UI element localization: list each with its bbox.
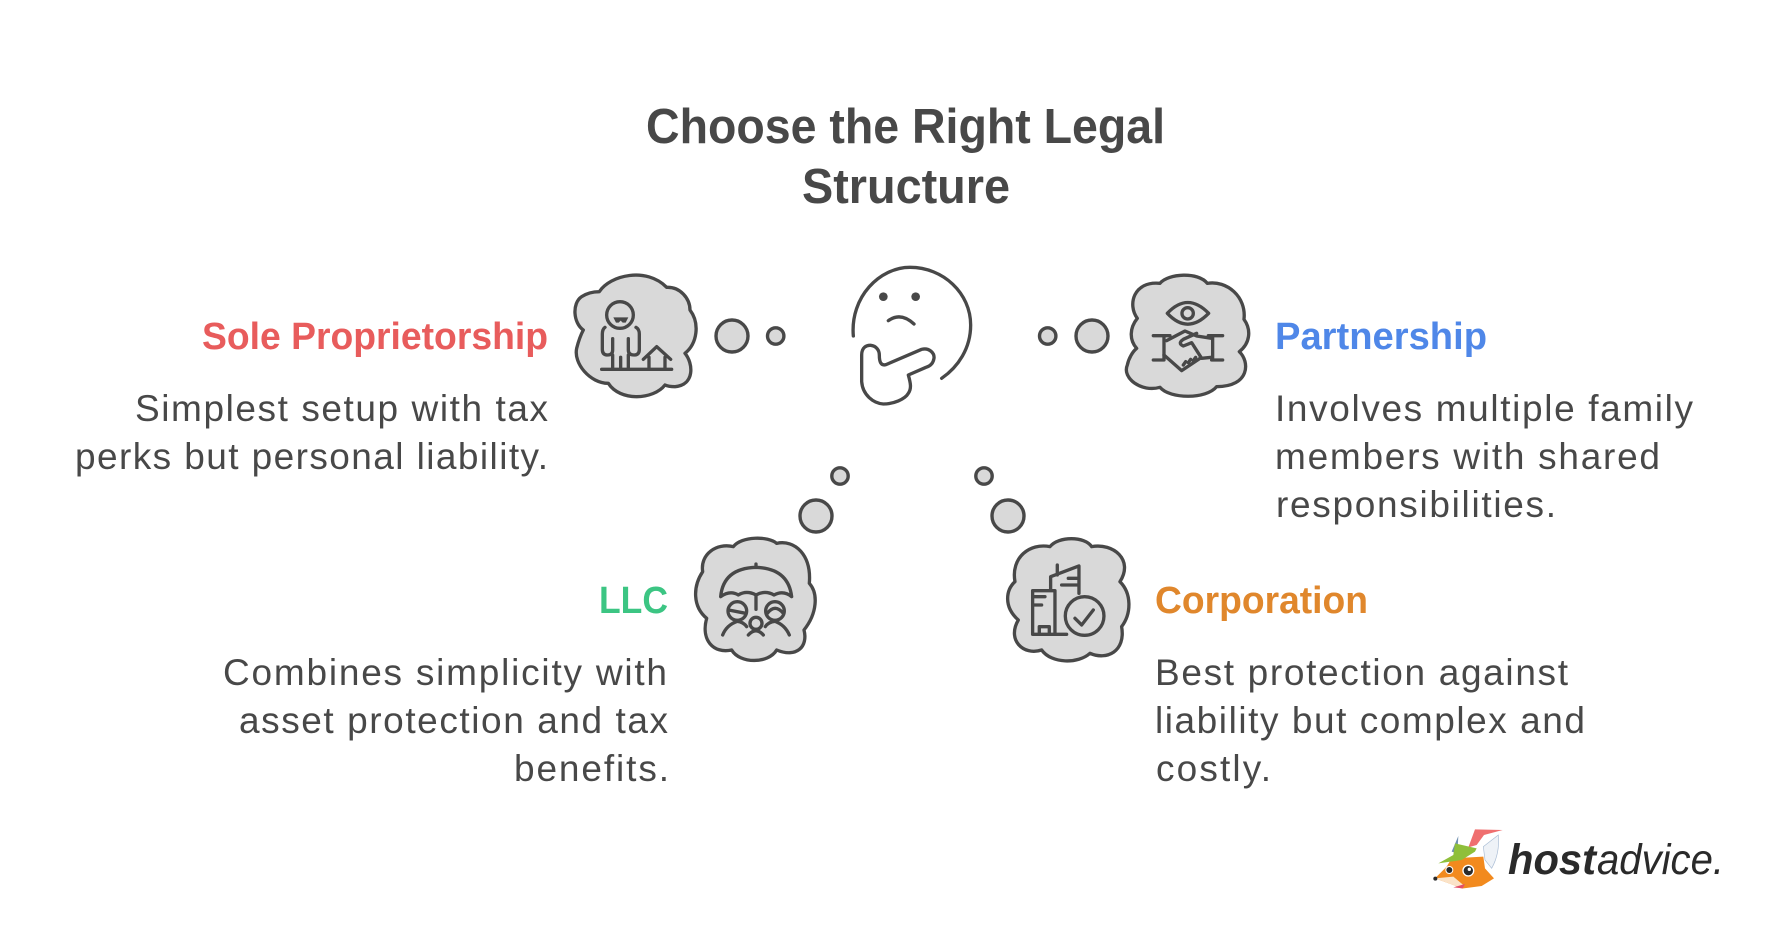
icon: office buildings and check in cloud: [1008, 539, 1129, 661]
text block: llc description: asset protection and tax: [239, 700, 668, 741]
heading: sole proprietorship: Sole Proprietorship: [202, 316, 548, 358]
heading: llc: LLC: [599, 580, 668, 622]
text block: llc description: Combines simplicity with: [223, 652, 667, 693]
panel: llc: [223, 468, 848, 789]
icon: umbrella and family in cloud: [696, 538, 815, 660]
text block: corporation description: liability but complex and: [1155, 700, 1585, 741]
icon: fox mascot: [1433, 829, 1503, 889]
icon: thinking face: [853, 267, 971, 404]
text block: llc description: benefits.: [514, 748, 669, 789]
icon: eye and handshake in cloud: [1126, 275, 1249, 396]
title: [646, 100, 1165, 214]
panel: partnership: [1040, 275, 1694, 525]
text block: partnership description: [1275, 388, 1694, 525]
connector dots: [1040, 320, 1108, 352]
text block: corporation description: [1155, 652, 1585, 789]
text block: corporation description: costly.: [1156, 748, 1271, 789]
connector dots: [800, 468, 848, 532]
text block: sole proprietorship description: [75, 388, 548, 477]
icon: person and house in cloud: [575, 275, 696, 397]
connector dots: [716, 320, 784, 352]
heading: partnership: Partnership: [1275, 316, 1487, 358]
panel: sole proprietorship: [75, 275, 784, 477]
text block: corporation description: Best protection against: [1155, 652, 1569, 693]
wordmark: advice.: [1597, 836, 1724, 884]
text block: llc description: [223, 652, 669, 789]
text block: partnership description: members with shared: [1275, 436, 1660, 477]
heading: corporation: Corporation: [1155, 580, 1368, 622]
panel: corporation: [976, 468, 1585, 789]
connector dots: [976, 468, 1024, 532]
wordmark: host: [1508, 836, 1598, 884]
title: Choose the Right Legal: [646, 100, 1165, 154]
text block: partnership description: Involves multiple family: [1275, 388, 1694, 429]
logo: hostadvice: [1433, 829, 1724, 889]
text block: sole proprietorship description: Simplest setup with tax: [135, 388, 548, 429]
text block: partnership description: responsibilities.: [1276, 484, 1556, 525]
text block: sole proprietorship description: perks but personal liability.: [75, 436, 548, 477]
title: Structure: [802, 160, 1010, 214]
